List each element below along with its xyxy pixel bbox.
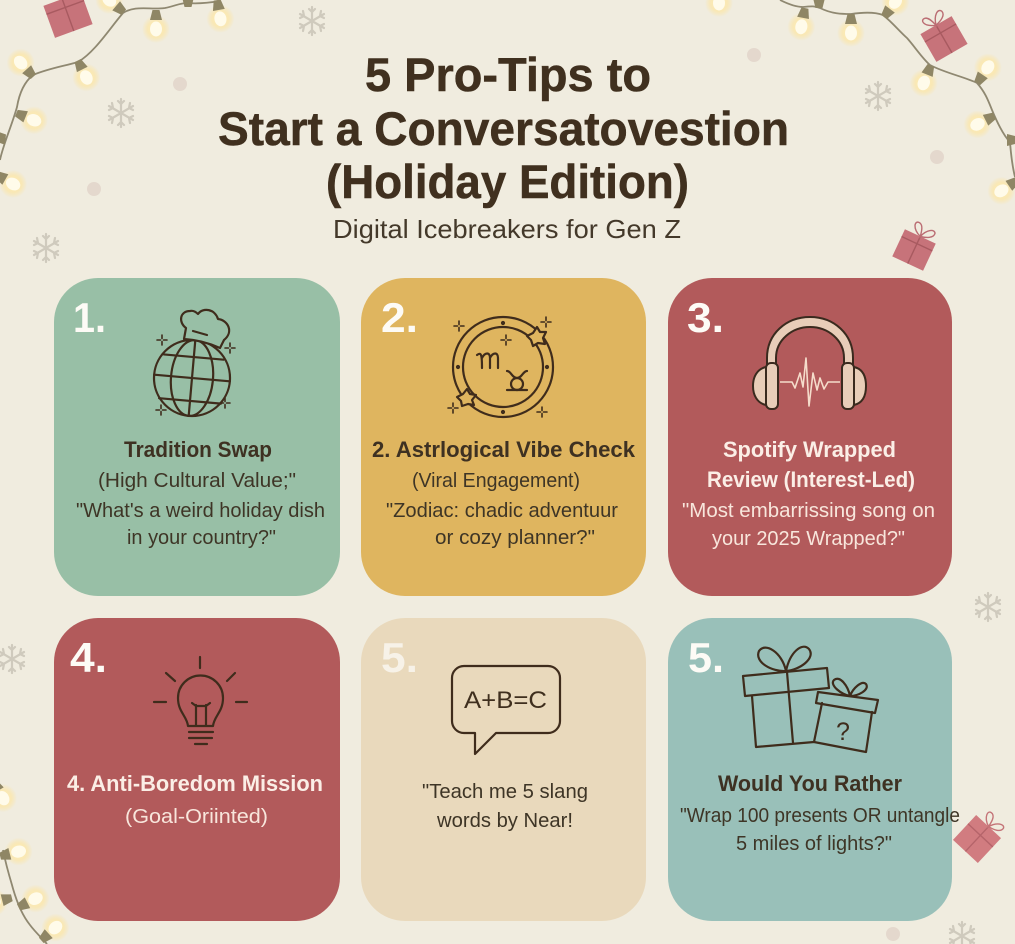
number 5 second: 5. xyxy=(688,634,724,681)
tip 1 text xyxy=(76,469,325,549)
tip 3 text: "Most embarrissing song on xyxy=(682,499,935,522)
tip 3 heading: Spotify Wrapped xyxy=(723,437,896,462)
tip 1 heading: Tradition Swap xyxy=(124,437,272,462)
subtitle: Digital Icebreakers for Gen Z xyxy=(333,214,681,244)
icon: light bulb xyxy=(154,657,247,744)
string lights: top left xyxy=(0,0,237,203)
tip 6 text xyxy=(680,804,960,855)
icon: two gifts: ? xyxy=(836,718,850,746)
gift: top left xyxy=(43,0,93,38)
tip 2 text: or cozy planner?" xyxy=(435,526,595,549)
tip 4 heading: 4. Anti-Boredom Mission xyxy=(67,771,323,796)
tip 1 text: in your country?" xyxy=(127,526,276,549)
icon: headphones xyxy=(753,317,866,409)
tip 2 text: (Viral Engagement) xyxy=(412,469,580,492)
gift: top right xyxy=(915,6,968,62)
gift: bottom right xyxy=(953,806,1009,863)
tip 2 text xyxy=(386,469,618,549)
tip 6 text: 5 miles of lights?" xyxy=(736,832,892,855)
icon: globe with chef hat xyxy=(151,310,235,419)
tip 6 heading: Would You Rather xyxy=(718,771,902,796)
tip 6 text: "Wrap 100 presents OR untangle xyxy=(680,804,960,827)
title: 5 Pro-Tips to xyxy=(365,48,651,101)
tip 5 text: "Teach me 5 slang xyxy=(422,780,588,803)
icon: speech bubble xyxy=(452,666,560,754)
panel: tip 4 anti-boredom mission xyxy=(54,618,340,921)
number 4: 4. xyxy=(70,634,107,681)
panel: tip 1 tradition swap xyxy=(54,278,340,596)
string lights: top right xyxy=(705,0,1015,210)
tip 3 heading: Review (Interest-Led) xyxy=(707,467,915,492)
number 3: 3. xyxy=(687,294,724,341)
tip 3 text xyxy=(682,499,935,550)
icon: speech bubble: A+B=C xyxy=(464,687,547,714)
icon: two gifts xyxy=(743,647,878,752)
tip 1 text: "What's a weird holiday dish xyxy=(76,499,325,522)
number 2: 2. xyxy=(381,294,418,341)
tip 5 text: words by Near! xyxy=(436,809,573,832)
panel: tip 3 spotify wrapped review xyxy=(668,278,952,596)
title: (Holiday Edition) xyxy=(326,155,689,208)
tip 5 text xyxy=(422,780,588,832)
title: Start a Conversatovestion xyxy=(218,102,789,155)
tip 4 text: (Goal-Oriinted) xyxy=(125,805,268,828)
tip 3 heading xyxy=(707,437,915,492)
panel: tip 2 astrological vibe check xyxy=(361,278,646,596)
tip 2 text: "Zodiac: chadic adventuur xyxy=(386,499,618,522)
icon: zodiac wheel xyxy=(448,317,553,417)
gift: middle right xyxy=(892,218,941,271)
tip 3 text: your 2025 Wrapped?" xyxy=(712,527,905,550)
string lights: bottom left xyxy=(0,775,75,944)
number 1: 1. xyxy=(73,294,106,341)
tip 2 heading: 2. Astrlogical Vibe Check xyxy=(372,437,636,462)
title xyxy=(218,48,789,208)
panel: tip 5 slang xyxy=(361,618,646,921)
tip 1 text: (High Cultural Value;" xyxy=(98,469,296,492)
number 5: 5. xyxy=(381,634,418,681)
decor: dots xyxy=(87,48,944,941)
panel: tip 6 would you rather xyxy=(668,618,960,921)
